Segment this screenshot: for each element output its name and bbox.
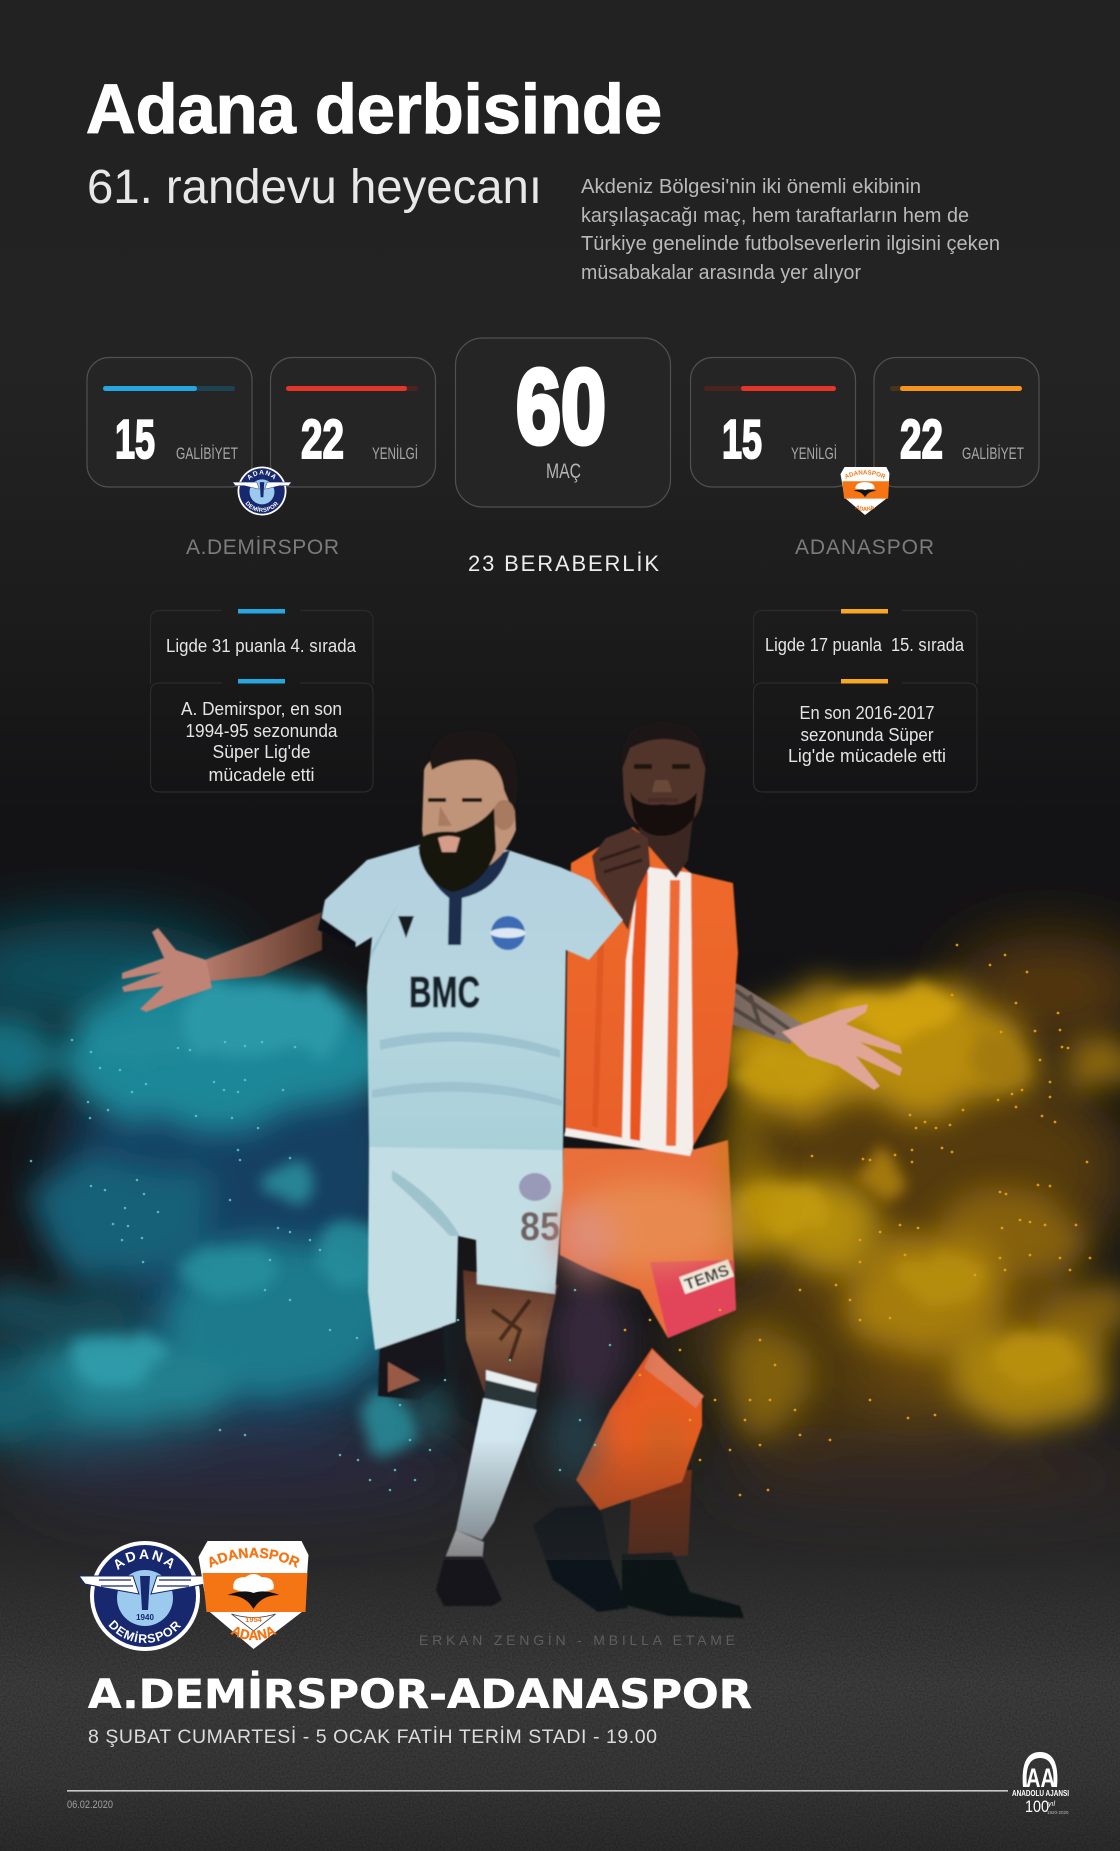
particles: teal <box>31 1040 610 1490</box>
open left hand <box>122 928 212 1012</box>
stat card: Adanaspor wins: GALİBİYET <box>962 444 1024 463</box>
icon: A.Demirspor crest <box>78 1541 204 1651</box>
stat card: Adanaspor losses: 15 <box>722 408 762 470</box>
stat card: A.Demirspor losses: YENİLGİ <box>372 444 418 463</box>
smoke over the players <box>0 1090 1120 1560</box>
icon: small A.Demirspor crest: DEMİRSPOR <box>245 501 278 512</box>
intro paragraph: Akdeniz Bölgesi'nin iki önemli ekibinin <box>581 176 921 198</box>
left arm <box>200 912 322 982</box>
knee band <box>484 1370 538 1412</box>
icon: Anadolu Ajansı logo <box>1012 1752 1069 1816</box>
draws: 23 BERABERLİK <box>468 551 659 576</box>
info panel: Demirspor last top flight season: 1994-95 sezonunda <box>186 721 338 741</box>
boots <box>533 1505 628 1612</box>
sock <box>576 1348 702 1510</box>
colour smoke: orange right <box>690 935 1120 1508</box>
shorts <box>368 1144 563 1350</box>
info panel: Adanaspor last top flight season: En son 2016-2017 <box>800 703 934 723</box>
team name: A.Demirspor: A.DEMİRSPOR <box>186 536 339 559</box>
icon: Adanaspor crest: ADANASPOR <box>210 1548 300 1568</box>
info panel: Demirspor league position <box>150 609 373 684</box>
boot <box>436 1556 502 1606</box>
icon: Anadolu Ajansı logo: 1920-2020 <box>1047 1810 1069 1815</box>
icon: small A.Demirspor crest: ADANA <box>248 470 276 480</box>
orange jersey <box>565 827 738 1150</box>
stat card: total matches: MAÇ <box>546 460 581 483</box>
title: Adana derbisinde <box>86 70 662 148</box>
head <box>636 800 695 878</box>
kit maker mark <box>398 916 414 938</box>
info panel: Demirspor last top flight season: A. Demirspor, en son <box>181 699 342 719</box>
icon: Anadolu Ajansı logo: AA <box>1026 1763 1055 1793</box>
player: Erkan Zengin (light blue kit) <box>122 730 623 1606</box>
info panel: Adanaspor last top flight season: Lig'de mücadele etti <box>788 746 946 766</box>
sponsor sticker: TEMS <box>683 1262 732 1294</box>
info panel: Demirspor league position: Ligde 31 puanla 4. sırada <box>166 636 357 656</box>
stat card: A.Demirspor wins: 15 <box>115 408 155 470</box>
player: Mbilla Etame (orange kit) <box>533 721 902 1618</box>
thigh with tattoo <box>463 1270 558 1396</box>
icon: small Adanaspor crest: ADANASPOR <box>846 470 886 479</box>
open hand <box>782 1004 902 1090</box>
icon: small Adanaspor crest <box>840 467 890 515</box>
stat card: A.Demirspor wins: GALİBİYET <box>176 444 238 463</box>
intro paragraph <box>581 176 1000 284</box>
head <box>422 752 516 876</box>
stat card: Adanaspor losses: YENİLGİ <box>791 444 837 463</box>
icon: Adanaspor crest <box>198 1541 308 1649</box>
stat card: total matches: 60 <box>516 348 606 466</box>
icon: A.Demirspor crest: DEMİRSPOR <box>108 1620 182 1644</box>
stat card: A.Demirspor wins <box>87 358 252 487</box>
intro paragraph: karşılaşacağı maç, hem taraftarların hem de <box>581 205 969 227</box>
back leg <box>378 1325 446 1400</box>
trailing leg <box>628 1470 692 1556</box>
sock <box>456 1398 537 1540</box>
ground grain <box>0 1596 1120 1851</box>
intro paragraph: Türkiye genelinde futbolseverlerin ilgisini çeken <box>581 233 1000 255</box>
player names: ERKAN ZENGİN - MBILLA ETAME <box>419 1631 735 1648</box>
info panel: Demirspor last top flight season: mücadele etti <box>208 765 314 785</box>
stat card: A.Demirspor losses <box>270 358 436 487</box>
footer rule <box>67 1790 1008 1792</box>
info panel: Demirspor last top flight season <box>150 679 373 792</box>
icon: Adanaspor crest: 1954 <box>245 1615 263 1624</box>
jersey <box>317 845 623 1150</box>
collar and placket <box>418 846 510 945</box>
stat card: Adanaspor wins <box>874 358 1039 487</box>
shirt badge <box>490 916 526 950</box>
info panel: Demirspor last top flight season: Süper Lig'de <box>212 742 310 762</box>
match details: 8 ŞUBAT CUMARTESİ - 5 OCAK FATİH TERİM STADI - 19.00 <box>88 1725 657 1748</box>
icon: small Adanaspor crest: ADANA <box>855 505 875 511</box>
info panel: Adanaspor league position <box>754 609 977 684</box>
particles: gold <box>625 945 1090 1495</box>
intro paragraph: müsabakalar arasında yer alıyor <box>581 262 861 284</box>
icon: Anadolu Ajansı logo: yıl <box>1047 1801 1055 1808</box>
stat card: Adanaspor losses <box>690 358 856 487</box>
info panel: Adanaspor last top flight season: sezonunda Süper <box>800 725 934 745</box>
colour smoke: teal left <box>0 920 480 1520</box>
icon: Adanaspor crest: ADANA <box>230 1626 277 1640</box>
icon: A.Demirspor crest: ADANA <box>114 1550 174 1570</box>
pointing fist and arm <box>592 828 650 930</box>
player: Erkan Zengin (light blue kit): 85 <box>520 1205 560 1249</box>
date: 06.02.2020 <box>67 1799 113 1811</box>
icon: A.Demirspor crest: 1940 <box>136 1613 154 1622</box>
info panel: Adanaspor league position: Ligde 17 puanla 15. sırada <box>765 635 965 655</box>
tattooed arm <box>688 965 806 1044</box>
info panel: Adanaspor last top flight season <box>754 679 977 792</box>
icon: small A.Demirspor crest <box>232 466 292 516</box>
icon: Anadolu Ajansı logo: 100 <box>1025 1797 1049 1816</box>
icon: Anadolu Ajansı logo: ANADOLU AJANSI <box>1012 1788 1069 1798</box>
stat card: Adanaspor wins: 22 <box>900 408 943 470</box>
sponsor BMC: BMC <box>409 968 480 1017</box>
subtitle: 61. randevu heyecanı <box>87 161 542 214</box>
team name: Adanaspor: ADANASPOR <box>795 536 934 559</box>
shorts <box>560 1140 736 1338</box>
match title: A.DEMİRSPOR-ADANASPOR <box>88 1670 752 1718</box>
stat card: A.Demirspor losses: 22 <box>301 408 344 470</box>
stat card: total matches <box>456 338 670 507</box>
